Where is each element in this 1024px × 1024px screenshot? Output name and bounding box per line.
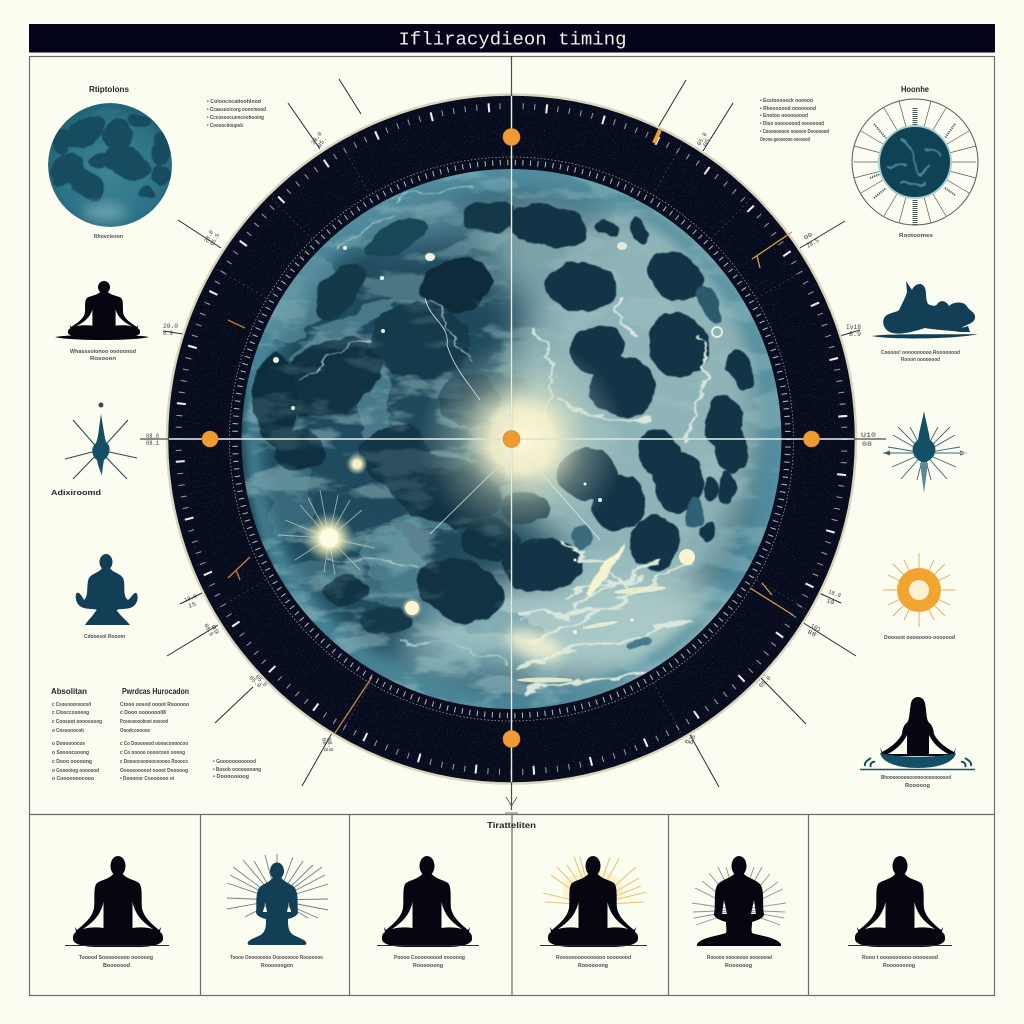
dial labels: U10 <box>861 432 877 439</box>
panel: stage 6: Rooooooong <box>883 963 915 969</box>
text block: upper right bullets: • Cooooooooo oooooo Dooooood <box>760 129 829 135</box>
small glowing craters <box>346 453 368 475</box>
dial labels: 08.1 <box>146 440 159 447</box>
title bar <box>29 24 995 52</box>
left hemisphere mottling <box>262 256 545 638</box>
figure: seated teal meditator, left: Cdooesol Rooom <box>84 634 125 640</box>
table: bottom left lists: c Doooocooooocooooo Roooco <box>120 759 189 765</box>
dial labels: 101 <box>809 622 822 634</box>
figure: seated woman with teal lotus <box>860 697 975 789</box>
table: bottom left lists: Ctooo oosod oooot Roooooo <box>120 702 190 708</box>
pale streaks <box>300 180 705 690</box>
dial labels: Iv18 <box>846 324 861 331</box>
base textures <box>241 169 782 709</box>
text block: upper left bullets: • Ccassucicorg ooocmood <box>207 107 266 113</box>
icon: right star symbol <box>883 411 967 493</box>
crack lines <box>425 298 600 540</box>
rim shading <box>248 176 774 702</box>
dial labels: 09 <box>209 624 221 636</box>
text block: upper right bullets: • Ecstooooock oooooo <box>760 98 814 104</box>
table: bottom left lists: c Co ooooo oooocooo oooog <box>120 750 185 756</box>
dial labels: 05.8 <box>254 673 269 689</box>
text block: upper right bullets: • Enotoo ooooooood <box>760 113 808 119</box>
text block: upper right bullets <box>760 98 829 143</box>
figure: seated black meditator, left: Rosooon <box>90 356 117 362</box>
dial labels: 08.8 <box>202 622 215 638</box>
dial labels: 08 <box>862 441 873 448</box>
panel: stage 6 <box>848 856 952 969</box>
large moon <box>195 169 782 709</box>
panel: stage 5 <box>692 856 786 969</box>
text block: upper right bullets: Onooo-gooooooo ooooood <box>760 137 810 143</box>
table: bottom left lists: Oooosooooot oooot Dooooog <box>120 768 188 774</box>
figure: seated teal meditator, left <box>76 554 138 640</box>
panel: stage 1: Booooood <box>103 963 130 969</box>
icon: orange sun <box>883 553 955 641</box>
dial labels: 09 <box>802 231 814 242</box>
panel: upper left moon: Rtiptolons <box>89 85 130 94</box>
panel: stage 3 <box>377 856 479 969</box>
table: bottom left lists: c Clooccooooog <box>52 710 89 716</box>
dial labels: 05. <box>316 135 329 149</box>
panel: stage 4: Roooooong <box>578 963 608 969</box>
text block: upper left bullets: • Cccosoocuoncoohooing <box>207 115 264 121</box>
table: bottom left lists: o Soooocooong <box>52 750 89 756</box>
text block: upper right bullets: • Rhooooood oooooood <box>760 106 816 112</box>
panel: stage 3: Roooooong <box>413 963 443 969</box>
panel: stage 2: Roooooogon <box>261 963 294 969</box>
dial labels: 05.8 <box>757 674 773 689</box>
panel: upper left moon <box>48 85 172 240</box>
dial labels: 05.8 <box>248 674 263 690</box>
right hemisphere dark maria <box>501 200 760 651</box>
dial labels: 08.0 <box>146 433 159 440</box>
figure: seated woman with teal lotus: Bhooooooooooooooooooooood <box>881 775 951 781</box>
panel: stage 5: Rooooo oooooooo oooooood <box>707 955 772 961</box>
table: bottom left lists: c Coosoot oooosooog <box>52 719 102 725</box>
lighter right hemisphere <box>325 193 765 685</box>
figure: reclining teal silhouette: Rooon oooooood <box>901 357 940 363</box>
panel: stage 2 <box>227 854 328 969</box>
dial labels: 8.8 <box>683 731 694 745</box>
dial labels: 8.9 <box>849 331 861 338</box>
text block: upper left bullets: • Coloococatioohlood <box>207 99 261 105</box>
panel: stage 1: Tooood Sooooooooo oooooog <box>79 955 153 961</box>
table: bottom left lists: o Cossooocob <box>52 728 85 734</box>
dial labels: 05. <box>702 134 714 148</box>
panel: stage 4: Rooooooooooooooo oooooood <box>556 955 631 961</box>
dial labels: 05.8 <box>752 670 768 685</box>
panel: upper right zodiac wheel: Hoonhe <box>901 85 930 94</box>
panel: upper left moon: Rhovcteson <box>94 234 124 240</box>
dial labels: 8.9 <box>163 330 173 337</box>
figure: reclining teal silhouette: Cooooo! oooooooooo Roooooood <box>881 350 960 356</box>
orange timing markers <box>202 128 820 748</box>
table: bottom left lists: c Dooo ooooooo08 <box>120 710 166 716</box>
table: bottom left lists: Ooodcooooos <box>120 728 150 734</box>
dial labels: 08.8 <box>320 737 329 753</box>
dial labels <box>146 130 877 753</box>
panel: stage 4 <box>540 856 647 969</box>
figure: reclining teal silhouette <box>872 281 978 363</box>
icon: left star symbol <box>51 402 137 497</box>
table: bottom left lists: c Co Dooooood oooocoooocoo <box>120 741 189 747</box>
dial labels: 88 <box>806 628 818 639</box>
dial labels: 18.8 <box>827 588 842 599</box>
dial labels: 28.5 <box>806 237 821 250</box>
dial labels: 28.0 <box>310 130 324 146</box>
table: bottom left lists: Pwrdcas Hurocadon <box>122 687 189 696</box>
title bar: Ifliracydieon timing <box>398 30 626 50</box>
text block: upper right bullets: • Dloo ooooooood oooooood <box>760 121 824 127</box>
table: bottom left lists: • Bosob oooooooong <box>213 767 261 773</box>
table: bottom left lists: • Goooooooooood <box>213 759 256 765</box>
central glow <box>423 345 618 540</box>
dial labels: 05.8 <box>696 131 709 147</box>
panel: upper right zodiac wheel <box>852 85 978 239</box>
dial labels: 28.0 <box>203 229 215 244</box>
dial labels: 10 <box>825 597 836 607</box>
table: bottom left lists: o Cooooooocooo <box>52 776 95 782</box>
bright lower right region <box>502 545 666 682</box>
panel: stage 2: Toooo Ooooooooo Ooooooooo Rooooooo <box>230 955 324 961</box>
figure: seated woman with teal lotus: Rooooog <box>905 783 930 789</box>
table: bottom left lists: c Dooo ooooong <box>52 759 92 765</box>
left hemisphere dark maria <box>253 201 518 634</box>
table: bottom left lists: c Csoooooroocod <box>52 702 91 708</box>
panel: stage 6: Rooo t oooooooooo-oooooood <box>862 955 938 961</box>
panel: stage 5: Roooooog <box>725 963 752 969</box>
table: bottom left lists: • Dooooor Cooooooo oi <box>120 776 174 782</box>
table: bottom left lists: • Doooooioog <box>213 774 249 780</box>
text block: upper left bullets <box>207 99 266 129</box>
dial ring <box>167 94 856 784</box>
table: bottom left lists <box>51 687 261 782</box>
table: bottom left lists: o Gooooiog oooosod <box>52 768 99 774</box>
figure: seated black meditator, left <box>55 281 149 362</box>
lunar highlights <box>273 218 722 634</box>
left streak overlay <box>241 300 511 700</box>
table: bottom left lists: Pcoooooooboot oooood <box>120 719 168 725</box>
callout lines around the dial <box>163 79 860 787</box>
dial labels: 55 <box>687 733 697 746</box>
table: bottom left lists: Absolitan <box>51 687 87 696</box>
dial labels: 08.8 <box>325 737 334 753</box>
text block: upper left bullets: • Cosoociioupsb <box>207 123 244 129</box>
dial labels: 20.0 <box>163 323 178 330</box>
panel: stage 1 <box>65 856 169 969</box>
panel: upper right zodiac wheel: Rootoomes <box>899 233 933 239</box>
dial labels: 15 <box>187 600 198 610</box>
panel: stage 3: Poooo Cooooooood oooooog <box>394 955 465 961</box>
crosshair lines <box>140 56 886 813</box>
star burst <box>278 490 375 575</box>
figure: seated black meditator, left: Whasssoionoo ooooonod <box>70 349 136 355</box>
icon: orange sun: Dooooot oooooooo-ooooood <box>884 635 955 641</box>
dial labels: 05.5 <box>209 232 221 247</box>
table: bottom left lists: o Doooooocos <box>52 741 85 747</box>
icon: left star symbol: Adixiroomd <box>51 488 101 497</box>
heading: bottom strip: Tiratteliten <box>487 821 536 830</box>
dial labels: 18.0 <box>183 593 198 604</box>
